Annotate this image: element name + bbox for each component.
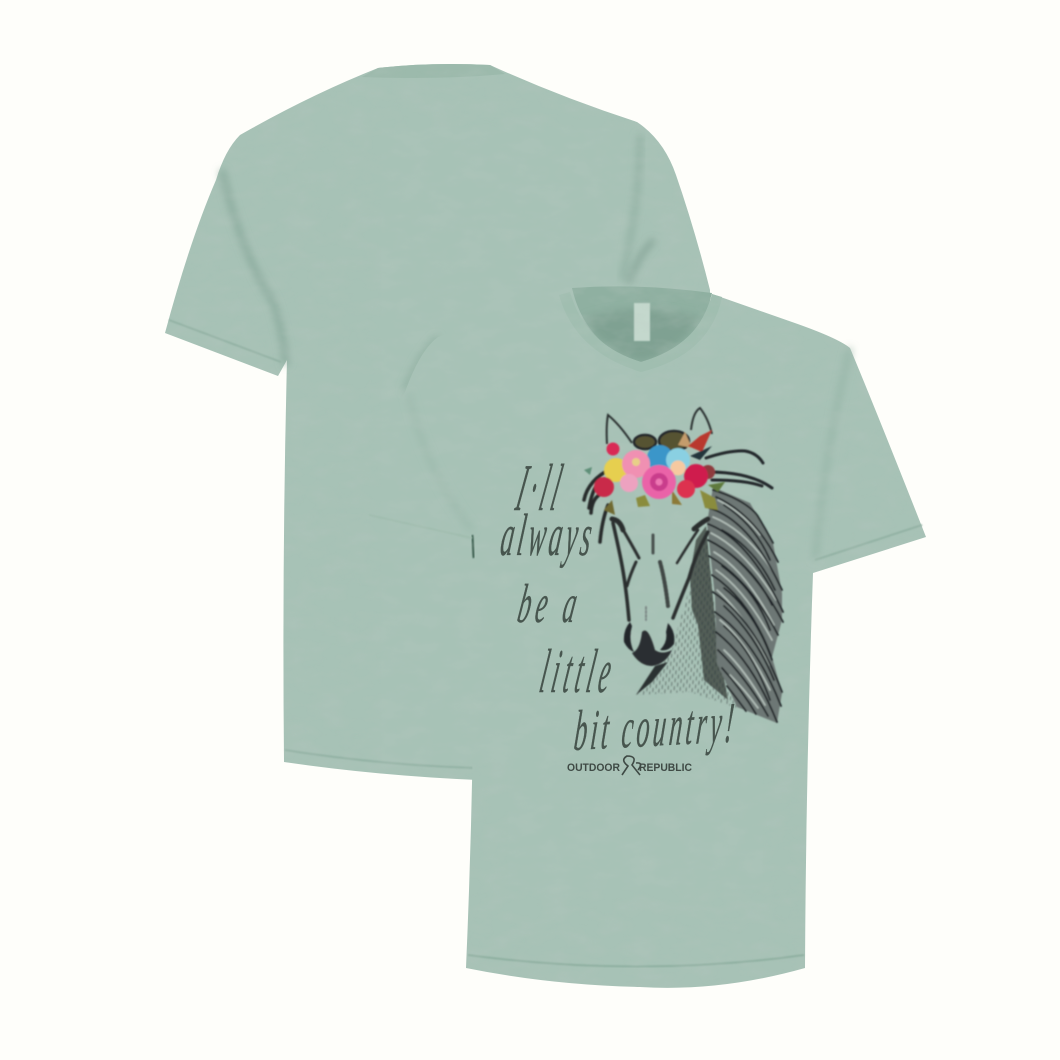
back collar (362, 64, 505, 78)
slogan line: bit country!: bit country! (572, 690, 740, 763)
forelock strands (584, 468, 612, 542)
brand word Outdoor: OUTDOOR (567, 762, 620, 774)
blossoms (594, 442, 715, 499)
slogan line: always: always (497, 504, 599, 569)
neck label (634, 303, 650, 341)
right cheek lines (677, 530, 698, 563)
slogan line: be a: be a (514, 574, 587, 635)
horse neck hatching (636, 530, 737, 708)
back bottom hem (285, 750, 476, 768)
leaves (584, 467, 725, 515)
left sleeve hem (369, 515, 472, 538)
horse illustration (584, 408, 783, 723)
mane dark strands (708, 490, 783, 722)
front collar (559, 292, 722, 372)
forehead mark (652, 535, 654, 553)
right eye (694, 519, 708, 529)
back sleeve hem (169, 320, 281, 362)
slogan line: little: little (535, 637, 622, 706)
muzzle shadow (632, 630, 672, 666)
front sleeve seams (408, 392, 472, 530)
logo monogram (622, 756, 641, 775)
face outline (612, 519, 708, 620)
heather fabric mottling (472, 288, 700, 550)
front neck interior (572, 286, 712, 364)
nose bridge marks (645, 607, 647, 620)
feathers (678, 430, 712, 460)
mane base shape (707, 487, 782, 723)
top buds (634, 431, 689, 451)
slogan script text (497, 452, 740, 763)
brand logo: Outdoor Republic (567, 756, 692, 775)
front shirt body (365, 292, 926, 988)
horse mane (584, 451, 783, 723)
back view t-shirt (165, 64, 710, 780)
ears (607, 408, 712, 444)
neck inner shade (585, 309, 700, 362)
back sleeve seam shading (222, 170, 286, 365)
left eye (612, 519, 623, 530)
front view t-shirt (365, 286, 926, 988)
neck shadow (636, 662, 668, 695)
brand word Republic: REPUBLIC (639, 762, 692, 774)
left nostril (624, 622, 634, 652)
mane light strands (711, 500, 776, 708)
mane top strands (706, 451, 772, 488)
left cheek lines (613, 523, 629, 620)
right sleeve hem (815, 525, 922, 560)
muzzle (624, 622, 674, 666)
back shirt body (165, 64, 710, 780)
front bottom hem (468, 955, 804, 966)
right ear (691, 408, 712, 434)
left ear (607, 415, 632, 444)
front shirt shadow (405, 337, 438, 392)
slogan line: I'll: I·ll (510, 452, 572, 526)
flower crown (584, 430, 725, 515)
right nostril (660, 623, 674, 650)
